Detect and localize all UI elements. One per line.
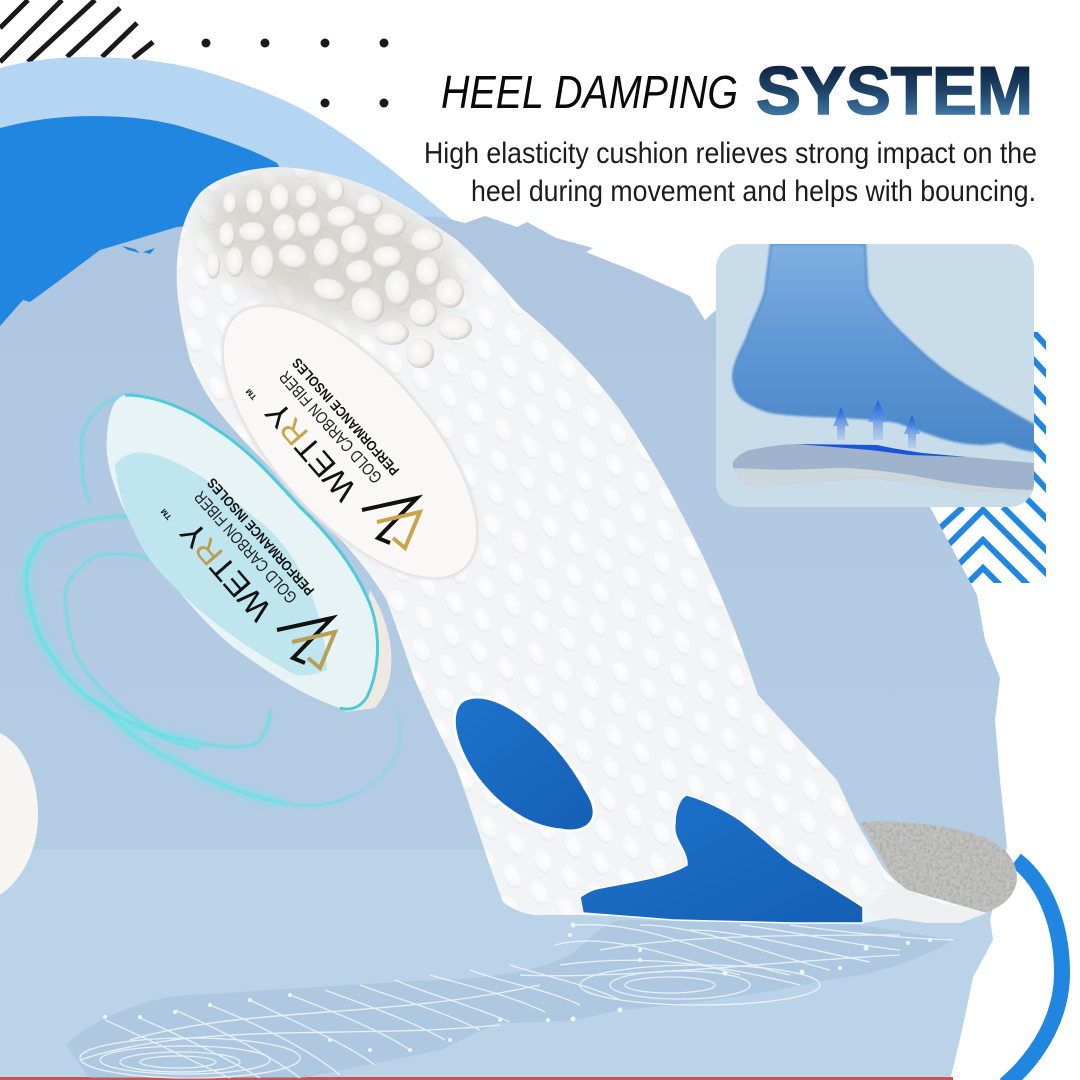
decoration: chevron pattern right: [939, 332, 1046, 583]
graphic: pearl oval badge: [177, 262, 523, 622]
decoration: black diagonal stripes: [0, 0, 153, 62]
illustration: blue insert strip: [797, 444, 967, 457]
decoration: white sphere left: [0, 733, 38, 895]
graphic: lens cyan rim: [125, 395, 378, 709]
text: trademark: TM: [244, 387, 259, 402]
graphic: white shell lip: [345, 590, 391, 712]
graphic: energy swirls: [26, 395, 400, 805]
illustration: insole side band: [733, 468, 1034, 494]
text: WETRY brand on small oval: WETRY: [173, 515, 278, 628]
text: gold carbon fiber small: GOLD CARBON FIBER: [190, 487, 301, 607]
decoration: torn blue flecks: [122, 246, 155, 254]
decoration: floor plane: [0, 850, 1003, 1080]
text block: subtitle: [424, 137, 1037, 208]
text: trademark small: TM: [159, 507, 174, 522]
decoration: blue arc bottom right: [1005, 860, 1062, 1080]
icon: WETRY logo mark small: [277, 618, 335, 668]
graphic: translucent lens: [107, 395, 378, 709]
graphic: energy swirl glow: [26, 537, 283, 803]
title: [441, 53, 1033, 129]
text: performance insoles small: PERFORMANCE INSOLES: [204, 475, 317, 599]
graphic: main insole: [177, 151, 987, 925]
graphic: detached cyan oval with swirl: [26, 395, 400, 805]
panel: pale blue brush background: [0, 215, 1007, 1080]
text: gold carbon fiber line: GOLD CARBON FIBER: [275, 367, 386, 487]
title: SYSTEM: [756, 53, 1033, 129]
icon: upward arrows: [833, 400, 920, 448]
decoration: saturated blue brush: [0, 116, 320, 345]
icon: WETRY logo mark: [362, 498, 420, 548]
graphic: lens teal interior: [115, 453, 327, 675]
illustration: foot: [733, 244, 1035, 451]
decoration: dot grid: [202, 38, 388, 108]
text: performance insoles line: PERFORMANCE INSOLES: [289, 355, 402, 479]
graphic: footprint sensor lines: [66, 920, 953, 1078]
decoration: red bottom line: [0, 1077, 953, 1080]
text: WETRY brand on badge: WETRY: [258, 395, 363, 508]
title: HEEL DAMPING: [441, 66, 738, 118]
panel: foot illustration: [716, 244, 1035, 507]
graphic: shaded bubbles near toe: [187, 151, 987, 925]
graphic: gray heel underside: [860, 822, 1017, 915]
graphic: blue arch pad: [454, 697, 594, 831]
graphic: blue heel wedge: [580, 795, 863, 923]
decoration: light blue arc: [0, 57, 470, 420]
illustration: insole in panel: [733, 444, 1034, 492]
